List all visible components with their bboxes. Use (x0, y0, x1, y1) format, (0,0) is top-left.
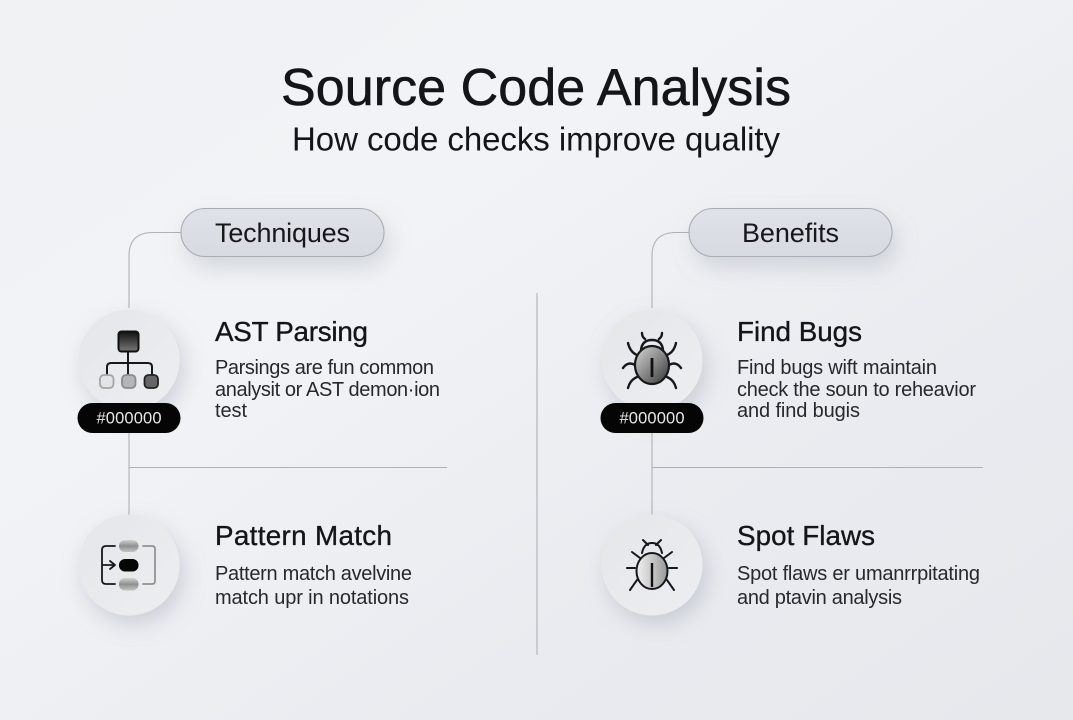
description (215, 357, 440, 422)
connector: benefits (652, 232, 983, 515)
description: match upr in notations (215, 587, 409, 609)
heading: Spot Flaws (737, 520, 875, 551)
icon disc: bug (602, 310, 702, 410)
description: check the soun to reheavior (737, 379, 976, 401)
title: Source Code Analysis (281, 59, 791, 117)
color tag (600, 403, 704, 433)
description (737, 357, 976, 422)
description: Find bugs wift maintain (737, 357, 937, 379)
color tag: #000000 (96, 410, 162, 428)
color tag: #000000 (620, 410, 684, 428)
icon disc: small bug (602, 514, 702, 616)
item: AST Parsing (78, 310, 440, 433)
heading pill: Benefits (689, 208, 892, 256)
heading pill: Benefits: Benefits (742, 218, 839, 248)
description: and find bugis (737, 400, 860, 422)
description: Parsings are fun common (215, 357, 434, 379)
icon disc: hierarchy (78, 310, 180, 410)
item: Pattern Match (78, 514, 412, 616)
item: Find Bugs (600, 310, 976, 433)
description: and ptavin analysis (737, 587, 902, 609)
heading: Find Bugs (737, 316, 862, 347)
description (215, 563, 412, 609)
description: Spot flaws er umanrrpitating (737, 563, 980, 585)
description: test (215, 400, 247, 422)
description: analysit or AST demon·ion (215, 379, 440, 401)
center divider (536, 293, 538, 655)
icon disc: pattern match (78, 514, 180, 616)
connector: techniques (129, 232, 447, 515)
heading: Pattern Match (215, 520, 392, 551)
item: Spot Flaws (602, 514, 980, 616)
color tag (78, 403, 180, 433)
heading: AST Parsing (215, 316, 368, 347)
description (737, 563, 980, 609)
description: Pattern match avelvine (215, 563, 412, 585)
heading pill: Techniques: Techniques (215, 218, 350, 248)
heading pill: Techniques (181, 208, 384, 256)
subtitle: How code checks improve quality (292, 120, 780, 158)
